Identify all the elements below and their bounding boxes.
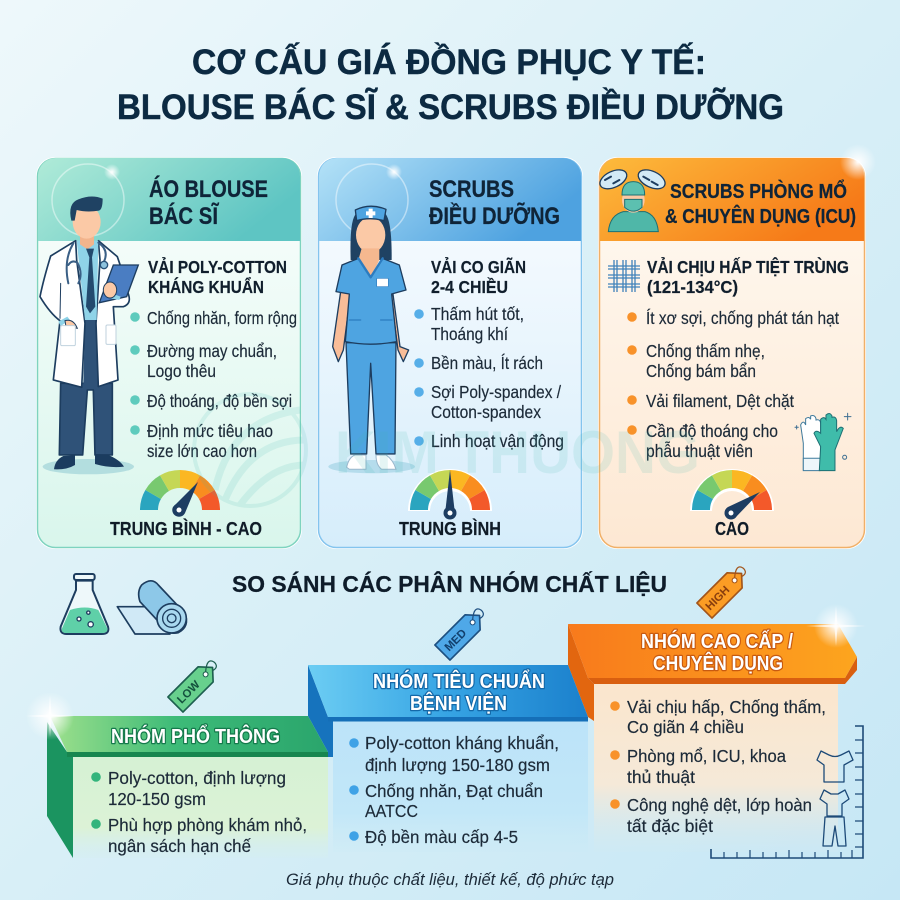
bullet list: Đường may chuẩn, bbox=[147, 341, 277, 361]
gauge: high bbox=[690, 469, 774, 520]
watermark: KIM THUONG bbox=[335, 419, 700, 486]
heading: NHÓM PHỔ THÔNG bbox=[111, 724, 280, 748]
bullet list: Linh hoạt vận động bbox=[431, 431, 564, 451]
icon: LOW price tag: LOW bbox=[175, 679, 203, 706]
heading: ĐIỀU DƯỠNG bbox=[429, 202, 560, 230]
gauge: medium-high bbox=[140, 470, 220, 517]
bullet list bbox=[91, 768, 307, 856]
bullet list: ngân sách hạn chế bbox=[108, 836, 251, 856]
bullet list: định lượng 150-180 gsm bbox=[365, 755, 550, 775]
step: nhóm phổ thông bbox=[47, 716, 328, 858]
icon: surgeon and lamps bbox=[597, 166, 668, 232]
heading: & CHUYÊN DỤNG (ICU) bbox=[665, 204, 856, 228]
icon: fabric roll bbox=[117, 581, 186, 634]
heading: material comparison: SO SÁNH CÁC PHÂN NHÓM CHẤT LIỆU bbox=[232, 570, 667, 597]
icon: flask bbox=[60, 574, 108, 634]
icon: nurse bbox=[328, 206, 415, 473]
bullet list: AATCC bbox=[365, 801, 418, 821]
panel: scrubs điều dưỡng bbox=[317, 157, 583, 549]
bullet list: Thoáng khí bbox=[431, 324, 508, 344]
bullet list bbox=[130, 308, 297, 461]
gauge: medium bbox=[408, 469, 492, 520]
bullet list bbox=[610, 697, 826, 836]
heading bbox=[429, 176, 560, 230]
bullet list: Cần độ thoáng cho bbox=[646, 421, 778, 441]
bullet list: phẫu thuật viên bbox=[646, 440, 753, 461]
title: BLOUSE BÁC SĨ & SCRUBS ĐIỀU DƯỠNG bbox=[117, 87, 784, 127]
bullet list: Chống bám bẩn bbox=[646, 361, 756, 381]
heading: SCRUBS bbox=[429, 176, 514, 203]
bullet list: Cotton-spandex bbox=[431, 402, 541, 422]
icon: gloves bbox=[795, 413, 851, 471]
bullet list: thủ thuật bbox=[627, 767, 695, 787]
icon: shirt bbox=[817, 751, 853, 782]
bullet list: Chống nhăn, form rộng bbox=[147, 308, 297, 328]
heading: BÁC SĨ bbox=[149, 202, 219, 230]
bullet list bbox=[627, 308, 839, 461]
bullet list: Thấm hút tốt, bbox=[431, 304, 524, 324]
bullet list: Phù hợp phòng khám nhỏ, bbox=[108, 815, 307, 835]
text block: fabric: KHÁNG KHUẨN bbox=[148, 276, 264, 297]
title bbox=[117, 42, 784, 127]
text block: fabric: VẢI POLY-COTTON bbox=[148, 256, 287, 277]
icon: LOW price tag bbox=[168, 656, 224, 712]
panel: scrubs phòng mổ & ICU bbox=[597, 157, 866, 549]
bullet list: Chống nhăn, Đạt chuẩn bbox=[365, 781, 543, 801]
panel: áo blouse bác sĩ bbox=[36, 157, 302, 549]
bullet list: 120-150 gsm bbox=[108, 789, 206, 809]
text block: fabric: (121-134°C) bbox=[647, 277, 738, 297]
bullet list: Độ thoáng, độ bền sợi bbox=[147, 391, 292, 411]
bullet list: Vải filament, Dệt chặt bbox=[646, 391, 794, 411]
bullet list bbox=[414, 304, 564, 451]
footnote: Giá phụ thuộc chất liệu, thiết kế, độ phức tạp bbox=[286, 871, 614, 889]
text block: fabric bbox=[647, 256, 849, 297]
step: nhóm cao cấp / chuyên dụng bbox=[568, 624, 857, 852]
text block: fabric bbox=[431, 256, 526, 297]
bullet list: Độ bền màu cấp 4-5 bbox=[365, 827, 518, 847]
bullet list: Vải chịu hấp, Chống thấm, bbox=[627, 697, 826, 717]
bullet list: Công nghệ dệt, lớp hoàn bbox=[627, 795, 812, 815]
label: high: CAO bbox=[715, 518, 749, 539]
bullet list: Phòng mổ, ICU, khoa bbox=[627, 746, 786, 766]
watermark bbox=[194, 394, 700, 506]
heading: CHUYÊN DỤNG bbox=[653, 651, 783, 675]
icon: scrub set bbox=[820, 790, 849, 846]
heading bbox=[373, 669, 545, 715]
heading bbox=[641, 629, 793, 675]
bullet list: size lớn cao hơn bbox=[147, 441, 257, 461]
bullet list: Poly-cotton kháng khuẩn, bbox=[365, 733, 559, 753]
text block: fabric: VẢI CHỊU HẤP TIỆT TRÙNG bbox=[647, 256, 849, 277]
icon: HIGH price tag: HIGH bbox=[704, 584, 732, 613]
bullet list: Chống thấm nhẹ, bbox=[646, 341, 765, 361]
icon: doctor bbox=[40, 196, 138, 474]
step: nhóm tiêu chuẩn bệnh viện bbox=[308, 665, 588, 852]
bullet list: Co giãn 4 chiều bbox=[627, 717, 744, 737]
icon: measuring ruler bbox=[711, 726, 863, 858]
bullet list: Bền màu, Ít rách bbox=[431, 353, 543, 373]
icon: HIGH price tag bbox=[697, 562, 753, 618]
sparkles bbox=[26, 144, 876, 740]
heading: NHÓM CAO CẤP / bbox=[641, 629, 793, 653]
icon: woven fabric bbox=[608, 260, 640, 292]
bullet list: Ít xơ sợi, chống phát tán hạt bbox=[646, 308, 839, 328]
label: medium-high: TRUNG BÌNH - CAO bbox=[110, 518, 262, 539]
text block: fabric: 2-4 CHIỀU bbox=[431, 276, 508, 297]
heading: ÁO BLOUSE bbox=[149, 175, 268, 203]
bullet list: Sợi Poly-spandex / bbox=[431, 382, 561, 402]
bullet list bbox=[349, 733, 559, 847]
heading bbox=[149, 175, 268, 230]
heading: NHÓM TIÊU CHUẨN bbox=[373, 669, 545, 693]
bullet list: Định mức tiêu hao bbox=[147, 421, 273, 441]
title: CƠ CẤU GIÁ ĐỒNG PHỤC Y TẾ: bbox=[192, 42, 706, 82]
icon: MED price tag bbox=[435, 604, 491, 660]
heading: BỆNH VIỆN bbox=[410, 691, 507, 715]
icon: MED price tag: MED bbox=[443, 627, 469, 654]
bullet list: Logo thêu bbox=[147, 361, 216, 381]
heading: SCRUBS PHÒNG MỔ bbox=[670, 179, 847, 203]
bullet list: Poly-cotton, định lượng bbox=[108, 768, 286, 788]
text block: fabric: VẢI CO GIÃN bbox=[431, 256, 526, 277]
bullet list: tất đặc biệt bbox=[627, 816, 713, 836]
heading bbox=[665, 179, 856, 228]
text block: fabric bbox=[148, 256, 287, 297]
label: medium: TRUNG BÌNH bbox=[399, 518, 501, 539]
